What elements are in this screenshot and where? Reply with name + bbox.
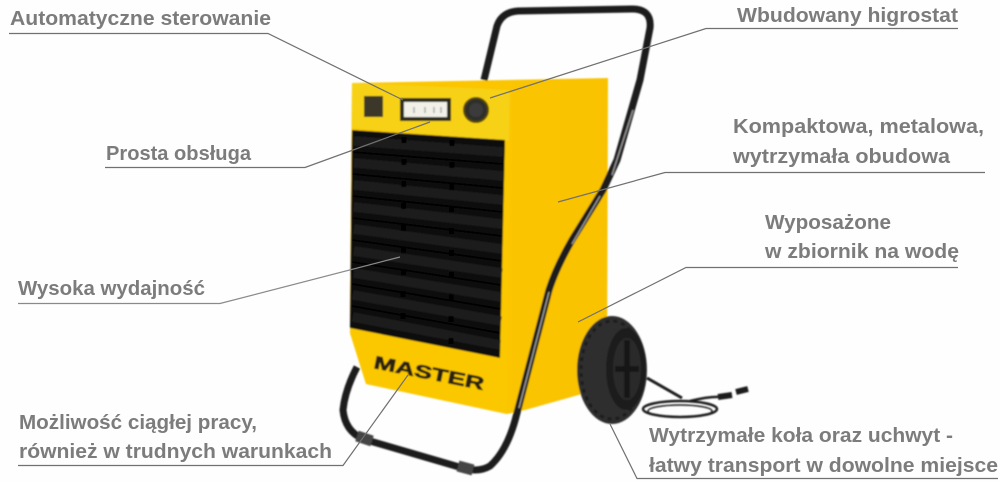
hygrostat knob [464,98,488,122]
control panel [364,96,488,122]
callout: Wytrzymałe koła oraz uchwyt: łatwy transport w dowolne miejsce [649,455,998,477]
callout: Automatyczne sterowanie: Automatyczne sterowanie [10,8,271,30]
callout: Kompaktowa, metalowa obudowa: wytrzymała obudowa [732,146,951,168]
power cord [643,378,748,417]
power switch [364,96,383,117]
callout: Wyposażone w zbiornik na wodę [578,212,959,322]
callout: Kompaktowa, metalowa obudowa: Kompaktowa, metalowa, [733,116,984,138]
frame handle [343,9,650,470]
callout: Wyposażone w zbiornik na wodę: Wyposażone [765,212,891,234]
callout: Wyposażone w zbiornik na wodę: w zbiornik na wodę [764,241,959,263]
callout: Możliwość ciągłej pracy: również w trudnych warunkach [19,441,332,463]
callout: Wysoka wydajność: Wysoka wydajność [18,278,205,300]
body casing [350,78,608,414]
callout: Wysoka wydajność [18,257,400,304]
callout: Prosta obsługa: Prosta obsługa [106,143,252,165]
grille [350,130,505,358]
callout: Wytrzymałe koła oraz uchwyt [610,424,998,478]
handle highlights [519,110,633,408]
logo: MASTER [372,352,486,394]
callout: Możliwość ciągłej pracy: Możliwość ciągłej pracy, [19,412,257,434]
callout: Wbudowany higrostat: Wbudowany higrostat [737,5,958,27]
callout: Prosta obsługa [105,122,430,168]
frame feet [357,436,473,470]
wheel [577,316,647,424]
callout: Kompaktowa, metalowa obudowa [558,116,985,202]
callout: Wbudowany higrostat [490,5,958,98]
display [400,98,451,121]
illustration: dehumidifier [343,9,748,470]
callout: Wytrzymałe koła oraz uchwyt: Wytrzymałe koła oraz uchwyt - [649,425,953,447]
callout: Możliwość ciągłej pracy [18,375,408,466]
callout: Automatyczne sterowanie [9,8,403,100]
